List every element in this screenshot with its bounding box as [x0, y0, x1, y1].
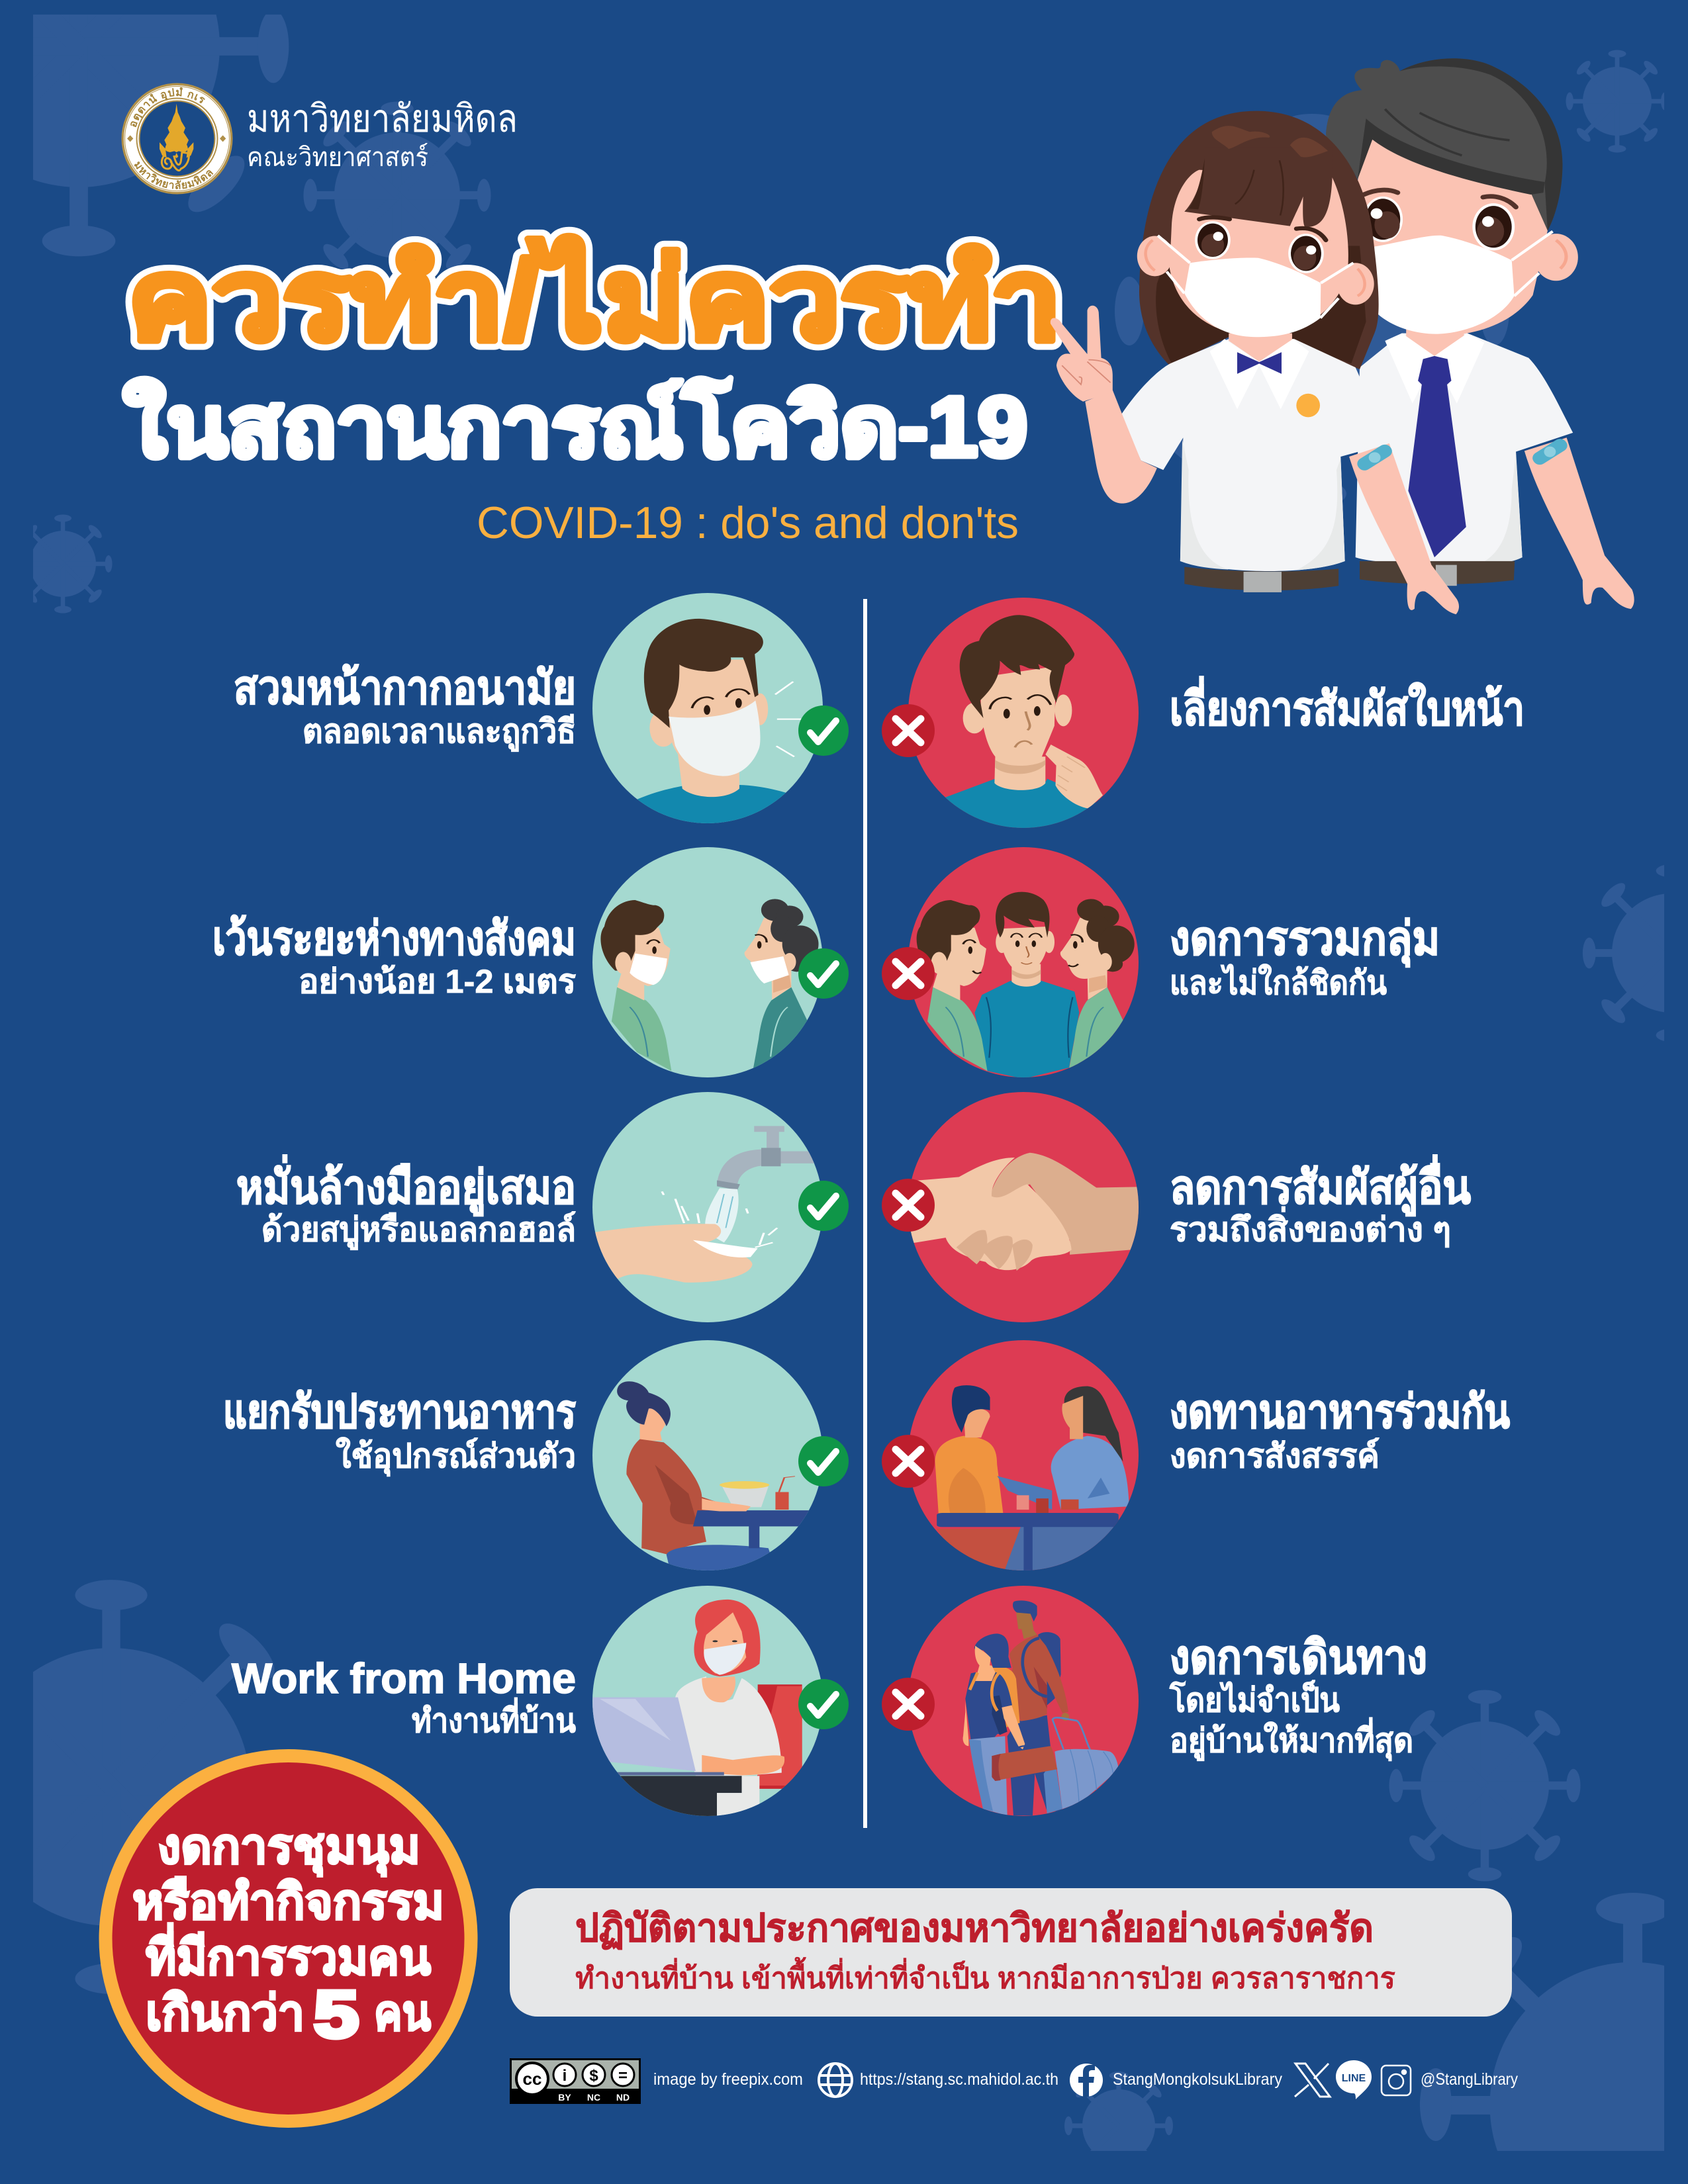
English subtitle: COVID-19 : do's and don'ts [477, 498, 1019, 548]
callout: no gatherings over 5 people: คน [374, 1985, 431, 2040]
row 3 do: hand washing [592, 1092, 821, 1322]
creative commons badge: ND [616, 2092, 630, 2103]
text: work from home: ทำงานที่บ้าน [412, 1698, 576, 1739]
icon: X [1295, 2064, 1330, 2097]
text: wash hands: ด้วยสบู่หรือแอลกอฮอล์ [261, 1211, 576, 1250]
callout: no gatherings over 5 people: หรือทำกิจกรรม [132, 1874, 444, 1929]
text: no shared meals: งดทานอาหารร่วมกัน [1170, 1386, 1510, 1437]
illustration: two masked students [1051, 58, 1634, 614]
logo: Mahidol University seal: มหาวิทยาลัยมหิดล [134, 161, 213, 189]
notice box [510, 1888, 1512, 2017]
row 2 do: social distancing [592, 847, 823, 1077]
boy [1326, 58, 1634, 609]
title: do's and don'ts in Thai: ควรทำ/ไม่ควรทำ [128, 236, 1062, 363]
callout: no gatherings over 5 people: งดการชุมนุม [158, 1819, 420, 1877]
title: do's and don'ts in Thai: ควรทำ/ไม่ควรทำ [128, 236, 1062, 363]
creative commons badge: $ [589, 2067, 598, 2085]
badge: check row 5 [798, 1679, 849, 1729]
icon: LINE [1336, 2060, 1372, 2099]
divider [863, 599, 867, 1828]
badge: cross row 3 [882, 1179, 935, 1232]
university name [247, 97, 518, 172]
icon: facebook [1070, 2064, 1103, 2097]
badge: cross row 4 [882, 1435, 935, 1488]
text: eat separately: แยกรับประทานอาหาร [223, 1386, 576, 1437]
text: no travel: อยู่บ้านให้มากที่สุด [1170, 1717, 1413, 1761]
text: no gathering: งดการรวมกลุ่ม [1170, 913, 1440, 968]
row 4 don't: dining together [908, 1340, 1139, 1574]
text: wash hands [236, 1154, 576, 1250]
logo: Mahidol University seal [122, 83, 233, 195]
text: keep distance: อย่างน้อย 1-2 เมตร [299, 963, 576, 1000]
text: keep distance: เว้นระยะห่างทางสังคม [212, 913, 576, 964]
icon: globe [819, 2064, 852, 2097]
subtitle: ในสถานการณ์โควิด-19 [123, 377, 1027, 475]
text: wear a mask [234, 662, 576, 752]
university name: คณะวิทยาศาสตร์ [247, 142, 428, 172]
text: wash hands: หมั่นล้างมืออยู่เสมอ [236, 1154, 576, 1216]
callout: no gatherings over 5 people: เกินกว่า [146, 1985, 305, 2040]
text: no gathering [1170, 913, 1440, 1001]
badge: check row 2 [798, 948, 849, 999]
row 5 don't: travelling [908, 1586, 1139, 1816]
text: no gathering: และไม่ใกล้ชิดกัน [1170, 964, 1387, 1001]
badge: check row 1 [798, 705, 849, 756]
footer: facebook page: StangMongkolsukLibrary [1113, 2070, 1282, 2089]
text: wear a mask: ตลอดเวลาและถูกวิธี [303, 713, 576, 752]
logo: Mahidol University seal: อตฺตานํ อุปมํ กเร [130, 87, 205, 127]
badge: check row 3 [798, 1181, 849, 1231]
row 5 do: work from home [591, 1586, 823, 1817]
row 1 don't: touching face [908, 598, 1139, 834]
footer: website: https://stang.sc.mahidol.ac.th [860, 2070, 1058, 2089]
footer: social handle: @StangLibrary [1421, 2070, 1518, 2089]
icon: Instagram [1382, 2066, 1411, 2095]
row 3 don't: handshake [902, 1092, 1150, 1322]
text: no travel [1169, 1631, 1427, 1761]
creative commons badge: cc [523, 2069, 541, 2089]
text: keep distance [212, 913, 576, 1000]
creative commons badge [510, 2058, 641, 2104]
text: no travel: งดการเดินทาง [1170, 1631, 1427, 1683]
row 1 do: wear a mask [592, 593, 823, 834]
university name: มหาวิทยาลัยมหิดล [247, 97, 518, 140]
creative commons badge: = [618, 2067, 628, 2085]
badge: cross row 5 [882, 1678, 935, 1731]
icon: LINE: LINE [1342, 2073, 1366, 2084]
text: reduce contact: รวมถึงสิ่งของต่าง ๆ [1170, 1206, 1451, 1248]
text: work from home [232, 1655, 576, 1739]
callout: no gatherings over 5 people [106, 1756, 471, 2121]
creative commons badge: BY [558, 2092, 571, 2103]
text: no shared meals [1170, 1386, 1510, 1475]
badge: check row 4 [798, 1436, 849, 1486]
row 2 don't: gathering [908, 847, 1139, 1079]
text: avoid touching face: เลี่ยงการสัมผัสใบหน้า [1170, 676, 1524, 735]
callout: no gatherings over 5 people: ที่มีการรวมคน [146, 1923, 431, 1985]
creative commons badge: NC [587, 2092, 600, 2103]
text: reduce contact: ลดการสัมผัสผู้อื่น [1170, 1154, 1471, 1216]
text: no shared meals: งดการสังสรรค์ [1170, 1437, 1380, 1475]
badge: cross row 1 [882, 704, 935, 757]
footer: image credit: image by freepix.com [653, 2070, 803, 2089]
text: work from home: Work from Home [232, 1655, 576, 1702]
badge: cross row 2 [882, 947, 935, 1000]
row 4 do: eat separately [592, 1340, 823, 1574]
notice box: ทำงานที่บ้าน เข้าพื้นที่เท่าที่จำเป็น หากมีอาการป่วย ควรลาราชการ [575, 1956, 1395, 1995]
creative commons badge: i [563, 2067, 567, 2085]
notice box: ปฏิบัติตามประกาศของมหาวิทยาลัยอย่างเคร่งครัด [575, 1907, 1374, 1950]
callout: no gatherings over 5 people: 5 [314, 1978, 359, 2052]
girl [1051, 111, 1459, 614]
text: eat separately: ใช้อุปกรณ์ส่วนตัว [336, 1437, 576, 1477]
text: eat separately [223, 1386, 576, 1477]
text: reduce contact [1170, 1154, 1471, 1248]
text: wear a mask: สวมหน้ากากอนามัย [234, 662, 576, 713]
text: no travel: โดยไม่จำเป็น [1169, 1680, 1340, 1719]
